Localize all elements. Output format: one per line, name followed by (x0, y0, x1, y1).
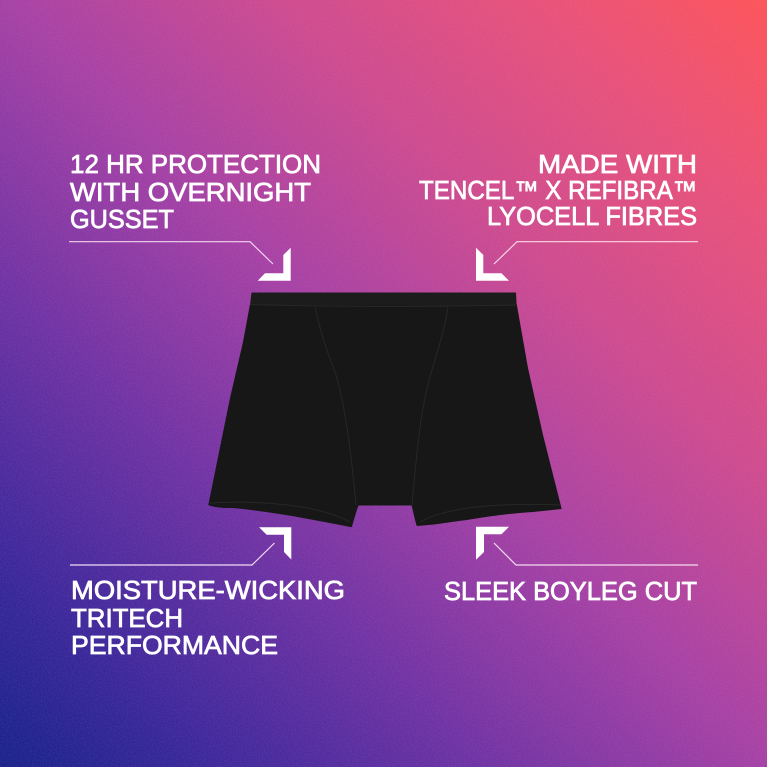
heading: lyocell fibres: MADE WITH (538, 151, 697, 179)
heading: overnight gusset (70, 151, 321, 234)
heading: lyocell fibres: TENCEL™ X REFIBRA™ (419, 177, 697, 205)
seams and hems (210, 304, 560, 522)
leader line: top left (69, 242, 273, 264)
leader line: bottom left (70, 543, 274, 565)
heading: moisture-wicking (71, 577, 345, 660)
heading: moisture-wicking: PERFORMANCE (71, 632, 278, 660)
leader line: top right (494, 242, 698, 264)
callout: lyocell fibres (419, 151, 698, 281)
heading: overnight gusset: GUSSET (70, 206, 174, 234)
leader line: bottom right (494, 543, 698, 565)
arrow: top left corner (258, 248, 291, 281)
heading: overnight gusset: WITH OVERNIGHT (70, 179, 311, 207)
callout: overnight gusset (69, 151, 321, 281)
heading: lyocell fibres (419, 151, 697, 231)
callout: moisture-wicking (70, 527, 345, 660)
heading: moisture-wicking: MOISTURE-WICKING (71, 577, 345, 605)
heading: overnight gusset: 12 HR PROTECTION (70, 151, 321, 179)
heading: lyocell fibres: LYOCELL FIBRES (487, 203, 697, 231)
arrow: bottom left corner (259, 527, 291, 560)
arrow: top right corner (476, 248, 509, 281)
heading: boyleg cut: SLEEK BOYLEG CUT (444, 578, 697, 606)
product: black boyleg shorts (208, 292, 562, 527)
waistband (250, 292, 517, 306)
heading: moisture-wicking: TRITECH (71, 605, 183, 633)
shorts body (208, 304, 562, 527)
callout: boyleg cut (444, 527, 698, 606)
arrow: bottom right corner (476, 527, 509, 560)
